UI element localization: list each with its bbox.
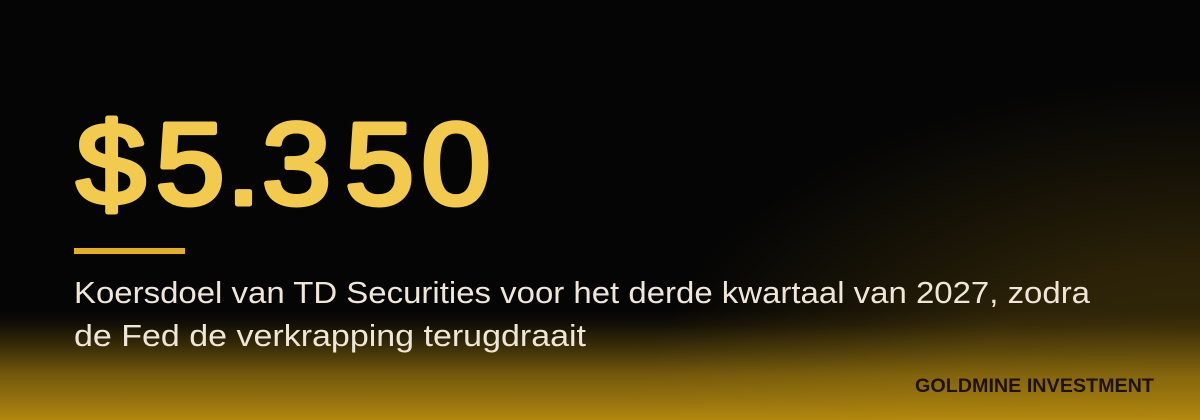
description text: de Fed de verkrapping terugdraait	[74, 318, 586, 353]
accent rule	[74, 248, 185, 254]
headline number: $5.350	[77, 100, 491, 229]
description text: Koersdoel van TD Securities voor het derde kwartaal van 2027, zodra	[74, 275, 1091, 310]
brand label: GOLDMINE INVESTMENT	[915, 376, 1154, 397]
